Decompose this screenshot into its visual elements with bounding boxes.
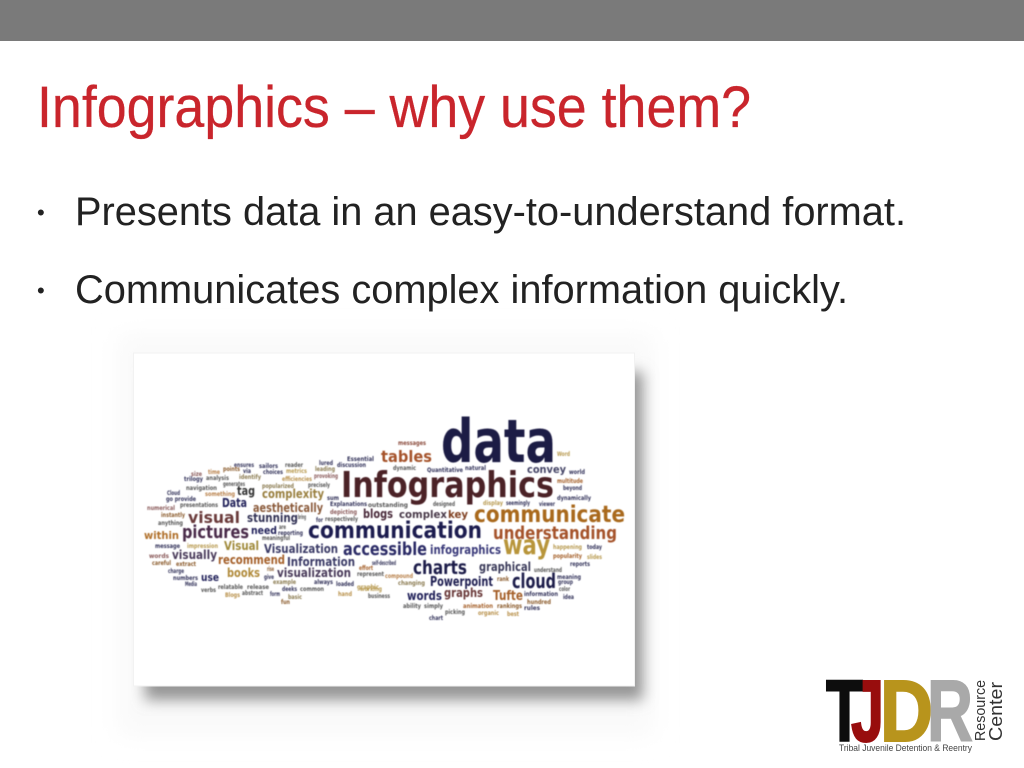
word cloud: Powerpoint	[430, 575, 493, 590]
bullet 2: Communicates complex information quickly.	[75, 268, 848, 312]
word cloud: multitude	[557, 477, 583, 485]
word cloud: rankings	[497, 602, 522, 610]
word cloud: effort	[359, 564, 373, 572]
word cloud: popularized	[262, 482, 294, 490]
header bar	[0, 0, 1024, 41]
word cloud: Media	[185, 580, 197, 588]
word cloud: reporting	[278, 529, 303, 537]
letter J: J	[851, 663, 884, 760]
bullet 1: Presents data in an easy-to-understand format.	[75, 190, 906, 234]
word cloud: use	[201, 571, 219, 584]
word cloud: are	[279, 523, 286, 531]
word cloud: stunning	[247, 511, 298, 525]
word cloud: changing	[398, 579, 425, 587]
word cloud: color	[559, 585, 570, 593]
word cloud: organic	[478, 609, 499, 617]
card shadow	[118, 335, 653, 735]
word cloud: charts	[413, 557, 467, 579]
word cloud: best	[507, 610, 519, 618]
word cloud: complexity	[262, 487, 324, 501]
letter R: R	[927, 663, 973, 760]
word cloud: words	[407, 589, 442, 603]
word cloud: numbers	[173, 574, 198, 582]
word cloud: graphs	[444, 586, 483, 600]
word cloud: visual	[188, 508, 240, 527]
word cloud: represent	[357, 570, 384, 578]
word cloud: Quantitative	[427, 466, 463, 474]
word cloud: Blogs	[225, 591, 240, 599]
word cloud: books	[227, 566, 260, 580]
word cloud: key	[448, 508, 468, 521]
title: Infographics – why use them?	[37, 75, 751, 140]
word cloud: rank	[497, 575, 509, 583]
word cloud: cloud	[512, 569, 556, 593]
word cloud: popularity	[553, 552, 583, 560]
word cloud: information	[524, 590, 558, 598]
word cloud: happening	[553, 543, 582, 551]
word cloud: designed	[433, 500, 455, 508]
word cloud: group	[558, 578, 573, 586]
word cloud: meaning	[557, 573, 581, 581]
word cloud: charge	[168, 567, 184, 575]
word cloud: depicting	[330, 508, 357, 516]
word cloud: picking	[445, 608, 465, 616]
word cloud: rise	[267, 565, 274, 573]
word cloud: self-described	[372, 559, 396, 567]
bullet list	[37, 190, 906, 312]
word cloud: tables	[381, 447, 432, 466]
word cloud: Visualization	[264, 542, 338, 556]
word cloud: words	[149, 552, 169, 560]
word cloud: today	[587, 543, 603, 551]
word cloud: dynamic	[393, 464, 416, 472]
word cloud: reports	[570, 560, 590, 568]
word cloud: idea	[563, 593, 574, 601]
word cloud: slides	[587, 553, 602, 561]
word cloud: rules	[524, 604, 540, 612]
word cloud: recommend	[218, 553, 285, 567]
word cloud: message	[155, 542, 180, 550]
bullet 2: •	[37, 278, 45, 303]
word cloud: messages	[398, 439, 426, 447]
word cloud: viewer	[539, 500, 556, 508]
word cloud: Data	[222, 496, 247, 510]
word cloud: something	[205, 490, 235, 498]
word cloud: Visual	[224, 539, 259, 553]
card	[134, 353, 634, 686]
word cloud: always	[314, 578, 333, 586]
word cloud: impression	[187, 542, 218, 550]
word cloud: generates	[223, 480, 245, 488]
word cloud: way	[503, 530, 550, 561]
word cloud: visually	[172, 548, 217, 562]
word cloud: need	[251, 524, 277, 537]
word cloud: choices	[263, 468, 283, 476]
word cloud: fun	[281, 598, 290, 606]
word cloud: hand	[338, 590, 352, 598]
word cloud: provoking	[314, 472, 338, 480]
word cloud: careful	[152, 559, 171, 567]
word cloud: world	[569, 468, 585, 476]
word cloud	[144, 407, 625, 622]
word cloud: data	[441, 407, 556, 477]
word cloud: Essential	[347, 455, 374, 463]
word cloud: working	[360, 585, 382, 593]
tagline: Tribal Juvenile Detention & Reentry	[839, 743, 972, 754]
word cloud: business	[368, 592, 390, 600]
word cloud: anything	[158, 519, 183, 527]
bullet 1: •	[37, 200, 45, 225]
word cloud: outstanding	[368, 501, 408, 509]
word cloud: dynamically	[557, 494, 592, 502]
word cloud: Infographics	[341, 465, 554, 506]
word cloud: go provide	[166, 495, 196, 503]
word cloud: extract	[176, 560, 196, 568]
word cloud: analysis	[206, 474, 229, 482]
word cloud: display	[483, 499, 504, 507]
word cloud: understanding	[493, 523, 617, 544]
word cloud: lured	[319, 459, 333, 467]
word cloud: Word	[557, 450, 570, 458]
word cloud: graphical	[479, 560, 531, 574]
word cloud: seemingly	[506, 499, 530, 507]
word cloud: visualization	[277, 566, 351, 580]
word cloud: Cloud	[167, 489, 180, 497]
word cloud: deeks	[282, 585, 297, 593]
word cloud: Explanations	[330, 500, 367, 508]
word cloud: form	[270, 590, 280, 598]
word cloud: navigation	[186, 484, 217, 492]
word cloud: respectively	[325, 515, 359, 523]
word cloud: abstract	[242, 589, 263, 597]
word cloud: reader	[285, 461, 304, 469]
word cloud: infographics	[430, 543, 501, 557]
word cloud: discussion	[337, 461, 366, 469]
word cloud: relatable	[218, 583, 243, 591]
word cloud: verbs	[201, 586, 216, 594]
word cloud: common	[300, 585, 324, 593]
word cloud: Information	[287, 555, 355, 569]
word cloud: Tufte	[493, 589, 523, 604]
word cloud: pictures	[182, 522, 249, 543]
word cloud: sum	[327, 494, 339, 502]
word cloud: via	[243, 467, 251, 475]
word cloud: convey	[527, 463, 566, 476]
letter D: D	[880, 663, 933, 760]
word cloud: for	[316, 516, 324, 524]
word cloud: accessible	[343, 539, 427, 560]
word cloud: ensures	[234, 461, 254, 469]
word cloud: beyond	[563, 484, 582, 492]
word cloud: instantly	[161, 511, 186, 519]
word cloud: aesthetically	[253, 501, 323, 515]
word cloud: points	[223, 465, 240, 473]
word cloud: natural	[465, 464, 486, 472]
word cloud: hundred	[527, 598, 551, 606]
word cloud: time	[208, 468, 220, 476]
word cloud: loaded	[336, 580, 354, 588]
word cloud: release	[247, 583, 269, 591]
Resource: Resource	[972, 680, 989, 741]
word cloud: example	[273, 578, 296, 586]
word cloud: numerical	[147, 504, 175, 512]
word cloud: ability	[403, 602, 422, 610]
word cloud: communication	[308, 518, 482, 544]
Center: Center	[986, 682, 1006, 741]
word cloud: leading	[315, 465, 335, 473]
word cloud: blogs	[363, 507, 393, 521]
word cloud: trilogy	[184, 475, 204, 483]
word cloud: compound	[385, 572, 413, 580]
word cloud: graphic	[357, 583, 379, 591]
word cloud: give	[264, 573, 274, 581]
word cloud: meaningful	[262, 534, 290, 542]
word cloud: precisely	[308, 481, 331, 489]
word cloud: size	[191, 470, 202, 478]
word cloud: within	[144, 529, 179, 542]
logo: TJDR Resource Center	[826, 663, 1006, 760]
word cloud: presentations	[180, 501, 218, 509]
word cloud: tag	[237, 484, 255, 498]
word cloud: bring	[298, 513, 306, 521]
word cloud: sailors	[259, 462, 278, 470]
word cloud: complex	[399, 508, 447, 521]
word cloud: identify	[239, 473, 262, 481]
word cloud: chart	[429, 614, 443, 622]
word cloud: metrics	[286, 467, 307, 475]
letter T: T	[826, 663, 863, 760]
picture: word cloud card with shadow	[118, 335, 653, 735]
word cloud: simply	[424, 602, 444, 610]
word cloud: understand	[534, 566, 562, 574]
word cloud: communicate	[474, 502, 625, 528]
word cloud: efficiencies	[282, 475, 312, 483]
word cloud: animation	[463, 602, 493, 610]
word cloud: basic	[288, 593, 302, 601]
